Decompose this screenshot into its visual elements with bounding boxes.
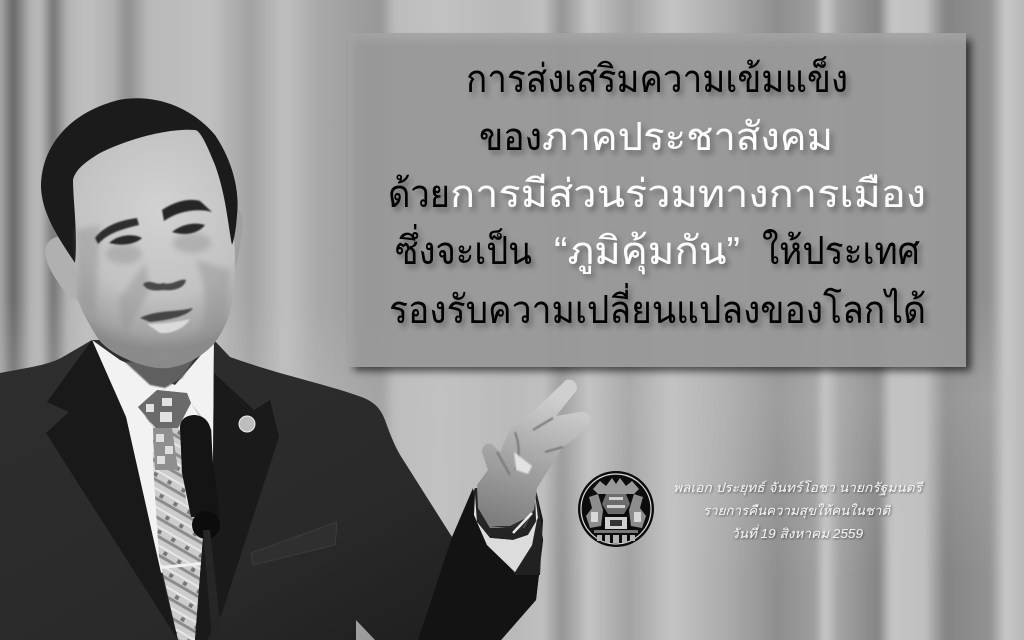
eye bag shading [76,225,230,362]
suit body [0,340,543,640]
right ear [228,207,242,272]
panel heading text: การส่งเสริมความเข้มแข็ง [466,55,848,101]
panel heading text: ของ [479,116,542,159]
panel heading text: ภาคประชาสังคม [542,116,833,159]
right eye [172,224,205,234]
mouth [140,308,193,322]
panel heading text: รองรับความเปลี่ยนแปลงของโลกได้ [389,283,926,332]
hair [41,98,238,263]
collar shadow [191,403,212,462]
right brow [162,200,212,221]
attribution text [673,480,924,541]
hand [477,380,590,533]
attribution text: วันที่ 19 สิงหาคม 2559 [731,524,863,541]
right lapel [195,340,279,640]
lower lip [147,319,190,333]
text panel with shadow [348,33,971,371]
left brow [95,218,139,244]
panel heading text: “ภูมิคุ้มกัน” [554,230,740,275]
attribution text: รายการคืนความสุขให้คนในชาติ [703,503,891,519]
panel heading text: การมีส่วนร่วมทางการเมือง [450,173,926,216]
left ear [45,237,80,300]
sleeve [418,488,543,640]
shirt cuff [474,493,538,572]
facial features [76,200,230,362]
left eye [109,235,142,245]
government seal [578,471,654,547]
attribution text: พลเอก ประยุทธ์ จันทร์โอชา นายกรัฐมนตรี [673,480,924,496]
shirt [92,340,214,573]
panel heading text: ให้ประเทศ [762,229,920,273]
panel heading text: ด้วย [388,173,450,216]
tie [138,390,203,640]
left lapel [46,340,178,640]
panel heading text [388,55,926,332]
face [73,130,235,368]
nose [143,280,186,290]
pocket [251,522,337,565]
person photo illustration [0,98,590,640]
lapel pin [239,416,255,432]
panel heading text: ซึ่งจะเป็น [395,224,532,273]
neck shadow [125,358,195,388]
seal emblem [586,478,646,543]
microphone [180,415,222,640]
